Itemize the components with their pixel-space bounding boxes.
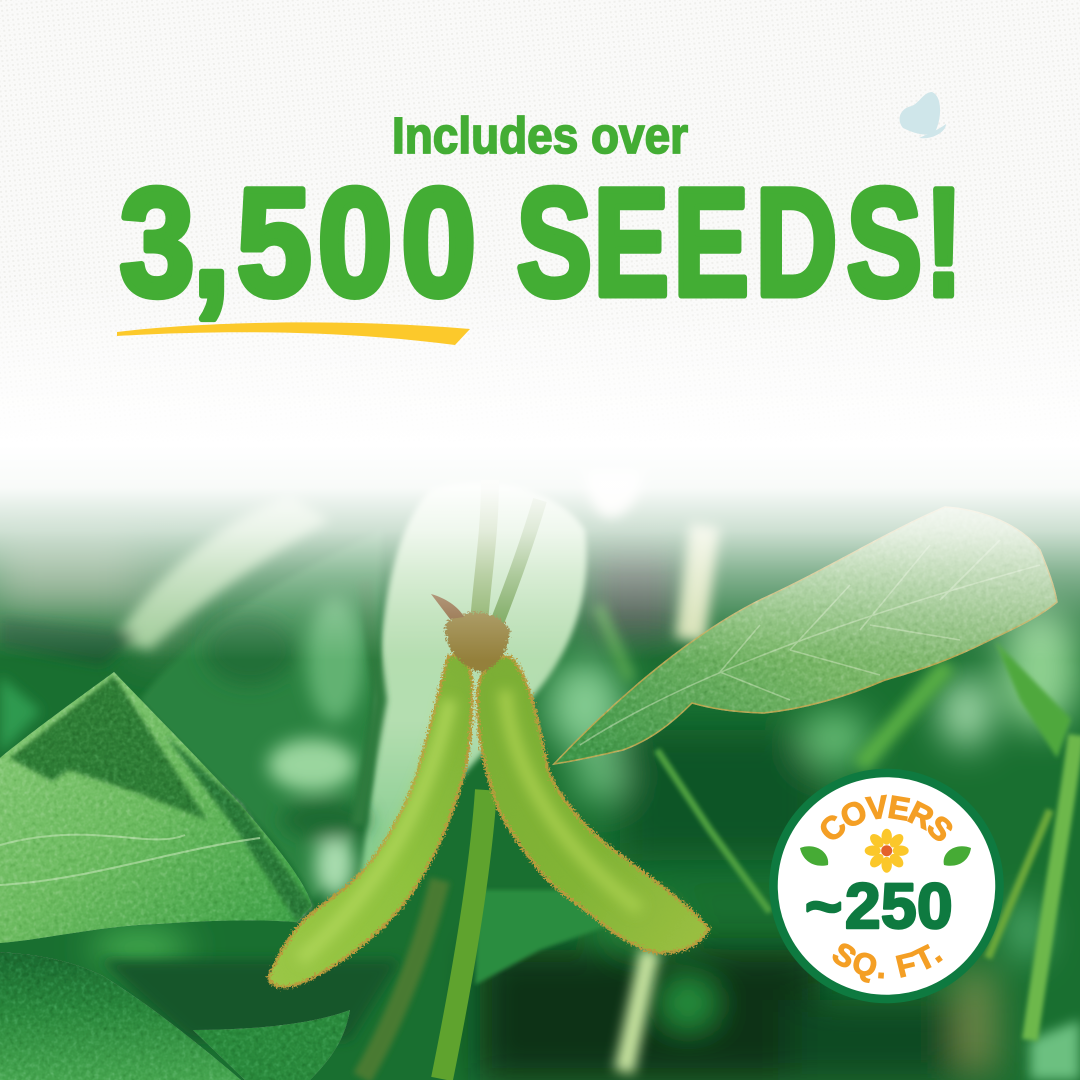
badge text: sq ft: SQ. FT. — [832, 943, 943, 983]
leaf: right narrow — [995, 641, 1071, 758]
yellow underline swoosh — [117, 322, 470, 345]
photo: soybean plant — [0, 445, 1080, 1080]
leaf: bottom-centre-left — [193, 1010, 350, 1080]
icon: flower — [865, 829, 909, 873]
leaf: bottom-left — [0, 952, 241, 1080]
leaf: left middle — [140, 530, 382, 900]
stems and right-hand plants — [362, 480, 1076, 1079]
white fade over photo — [0, 445, 1080, 660]
icon: right leaf — [944, 846, 971, 866]
pod: right — [477, 657, 709, 953]
badge text: covers: COVERS — [820, 794, 952, 841]
pod calyx — [445, 612, 510, 672]
icon: butterfly — [900, 92, 946, 138]
badge text: ~250: ~250 — [805, 870, 953, 942]
headline: 3,500 SEEDS! — [120, 156, 963, 328]
badge ring — [774, 773, 1000, 999]
text: 3,500: 3,500 — [120, 157, 476, 328]
badge: covers 250 sq ft — [769, 769, 1004, 1004]
icon: left leaf — [800, 846, 828, 866]
leaf: large left — [0, 672, 312, 943]
leaf: upper right — [554, 507, 1057, 764]
soybean pods — [269, 594, 709, 987]
leaf: centre upper — [360, 482, 587, 880]
pod spike — [431, 594, 464, 619]
background stems and soft leaves — [0, 470, 1080, 1080]
text: includes over: Includes over — [392, 107, 688, 164]
leaf: bottom-centre — [475, 890, 610, 985]
pod: left — [269, 655, 472, 987]
text: SEEDS!: SEEDS! — [517, 156, 963, 328]
fabric background — [0, 0, 1080, 446]
photo base colour — [0, 445, 1080, 1080]
blurred foliage backdrop — [0, 540, 1080, 1080]
